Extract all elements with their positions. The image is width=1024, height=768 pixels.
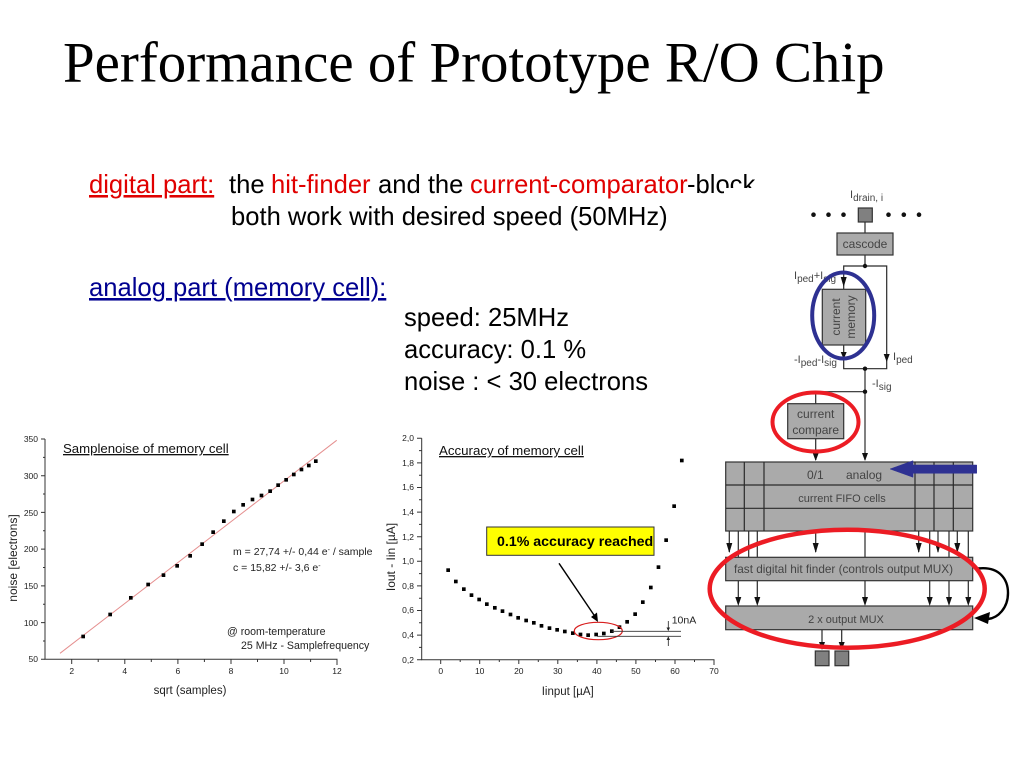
- chart: samplenoise of memory cell: Samplenoise of memory cell: [63, 441, 229, 456]
- chart: samplenoise of memory cell: @ room-temperature: [227, 626, 326, 638]
- text block: analog part: [89, 274, 648, 396]
- chart: samplenoise of memory cell: m = 27,74 +/- 0,44 e: [233, 546, 328, 558]
- highlight: current memory: [812, 272, 874, 358]
- chart: samplenoise of memory cell: 10: [279, 666, 289, 676]
- block: cascode: [837, 233, 893, 255]
- title: Performance of Prototype R/O Chip: [63, 32, 885, 94]
- highlight: digital blocks: [710, 530, 985, 648]
- current labels: ped: [896, 355, 913, 366]
- chart: accuracy of memory cell: 60: [670, 666, 680, 676]
- chart: samplenoise of memory cell: 6: [176, 666, 181, 676]
- block: current FIFO cells: analog: [846, 468, 882, 482]
- text block: analog part: speed: 25MHz: [404, 304, 569, 332]
- chart: accuracy of memory cell: 20: [514, 666, 524, 676]
- block: current compare: compare: [792, 423, 839, 437]
- text block: digital part: [89, 171, 755, 231]
- chart: samplenoise of memory cell: -: [318, 563, 321, 570]
- chart: accuracy of memory cell: 0,8: [402, 581, 414, 591]
- chart: samplenoise of memory cell: 250: [24, 508, 38, 518]
- text block: digital part: digital part:: [89, 171, 214, 199]
- current labels: +I: [814, 270, 823, 282]
- chart: samplenoise of memory cell: [6, 434, 373, 697]
- arrows: hit finder to MUX: [735, 581, 971, 606]
- current labels: ped: [797, 274, 814, 285]
- chart: accuracy of memory cell: 1,0: [402, 556, 414, 566]
- chart: samplenoise of memory cell: 2: [69, 666, 74, 676]
- wiring: [816, 222, 887, 460]
- chart: accuracy of memory cell: 1,2: [402, 532, 414, 542]
- chart: accuracy of memory cell: Iout - Iin [µA]: [384, 523, 398, 591]
- chart: accuracy of memory cell: 50: [631, 666, 641, 676]
- block: current memory: current: [829, 298, 843, 336]
- text block: analog part: noise : < 30 electrons: [404, 368, 648, 396]
- current labels: -I: [794, 354, 801, 366]
- text block: analog part: analog part (memory cell):: [89, 274, 386, 302]
- chart: samplenoise of memory cell: noise [electrons]: [6, 514, 20, 602]
- text block: digital part: and the: [378, 171, 463, 199]
- chart: accuracy of memory cell: 1,4: [402, 507, 414, 517]
- chart: samplenoise of memory cell: 4: [122, 666, 127, 676]
- block: current FIFO cells: [726, 462, 973, 531]
- chart: samplenoise of memory cell: 350: [24, 434, 38, 444]
- chart: accuracy of memory cell: 30: [553, 666, 563, 676]
- current labels: sig: [824, 358, 837, 369]
- chart: accuracy of memory cell: 70: [709, 666, 719, 676]
- current labels: [794, 270, 913, 393]
- chart: samplenoise of memory cell: 300: [24, 471, 38, 481]
- chart: samplenoise of memory cell: -: [328, 547, 331, 554]
- chart: accuracy of memory cell: 0: [438, 666, 443, 676]
- chart: accuracy of memory cell: Accuracy of memory cell: [439, 443, 584, 458]
- chart: samplenoise of memory cell: 100: [24, 618, 38, 628]
- block: current compare: [788, 404, 844, 439]
- chart: accuracy of memory cell: 0,6: [402, 605, 414, 615]
- chart: accuracy of memory cell: 1,6: [402, 482, 414, 492]
- current labels: -I: [817, 354, 824, 366]
- output connections: [815, 630, 849, 666]
- highlight: current compare: [772, 392, 858, 452]
- chart: accuracy of memory cell: 0,4: [402, 630, 414, 640]
- block: cascode: cascode: [843, 237, 888, 251]
- chart: accuracy of memory cell: 10: [475, 666, 485, 676]
- chart: accuracy of memory cell: 0.1% accuracy reached: [497, 534, 653, 550]
- chart: samplenoise of memory cell: 8: [229, 666, 234, 676]
- chart: accuracy of memory cell: 0,2: [402, 655, 414, 665]
- label: Idrain: drain, i: [853, 193, 883, 204]
- diagram: readout chain: [710, 188, 1008, 666]
- junctions and arrowheads: [813, 264, 890, 461]
- text block: digital part: -block: [687, 171, 755, 199]
- arrow: analog pointer: [890, 461, 977, 477]
- chart: accuracy of memory cell: [384, 433, 719, 698]
- block: output MUX: [726, 606, 973, 630]
- drain pad: [858, 208, 872, 222]
- chart: samplenoise of memory cell: 200: [24, 544, 38, 554]
- text block: digital part: hit-finder: [271, 171, 371, 199]
- text block: digital part: current-comparator: [470, 171, 688, 199]
- block: current memory: [822, 289, 866, 345]
- chart: accuracy of memory cell: 40: [592, 666, 602, 676]
- chart: samplenoise of memory cell: c = 15,82 +/- 3,6 e: [233, 562, 318, 574]
- chart: accuracy of memory cell: 2,0: [402, 433, 414, 443]
- current labels: sig: [823, 274, 836, 285]
- chart: samplenoise of memory cell: 12: [332, 666, 342, 676]
- arrows: FIFO to hit finder: [726, 531, 968, 557]
- block: output MUX: 2 x output MUX: [808, 614, 885, 626]
- chart: samplenoise of memory cell: 50: [29, 654, 38, 664]
- text block: digital part: the: [229, 171, 265, 199]
- block: current compare: current: [797, 407, 835, 421]
- text block: digital part: both work with desired speed (50MHz): [231, 203, 668, 231]
- chart: samplenoise of memory cell: / sample: [330, 546, 373, 558]
- chart: accuracy of memory cell: 10nA: [672, 614, 696, 626]
- block: fast digital hit finder: [726, 557, 973, 581]
- current labels: ped: [801, 358, 817, 369]
- chart: accuracy of memory cell: Iinput [µA]: [542, 686, 594, 698]
- text block: analog part: accuracy: 0.1 %: [404, 336, 586, 364]
- chart: samplenoise of memory cell: sqrt (samples): [154, 685, 227, 697]
- label: Idrain: I: [850, 189, 853, 201]
- chart: accuracy of memory cell: 1,8: [402, 458, 414, 468]
- block: current FIFO cells: current FIFO cells: [798, 493, 886, 505]
- arrow: feedback from hit finder to MUX: [974, 568, 1008, 624]
- current labels: -I: [872, 378, 879, 390]
- block: current memory: memory: [844, 295, 858, 339]
- current labels: I: [893, 351, 896, 363]
- current labels: I: [794, 270, 797, 282]
- chart: samplenoise of memory cell: 150: [24, 581, 38, 591]
- dots row: [811, 212, 921, 217]
- block: current FIFO cells: 0/1: [807, 468, 824, 482]
- chart: samplenoise of memory cell: 25 MHz - Samplefrequency: [241, 640, 370, 652]
- current labels: sig: [879, 382, 892, 393]
- block: fast digital hit finder: fast digital hit finder (controls output MUX): [734, 562, 953, 576]
